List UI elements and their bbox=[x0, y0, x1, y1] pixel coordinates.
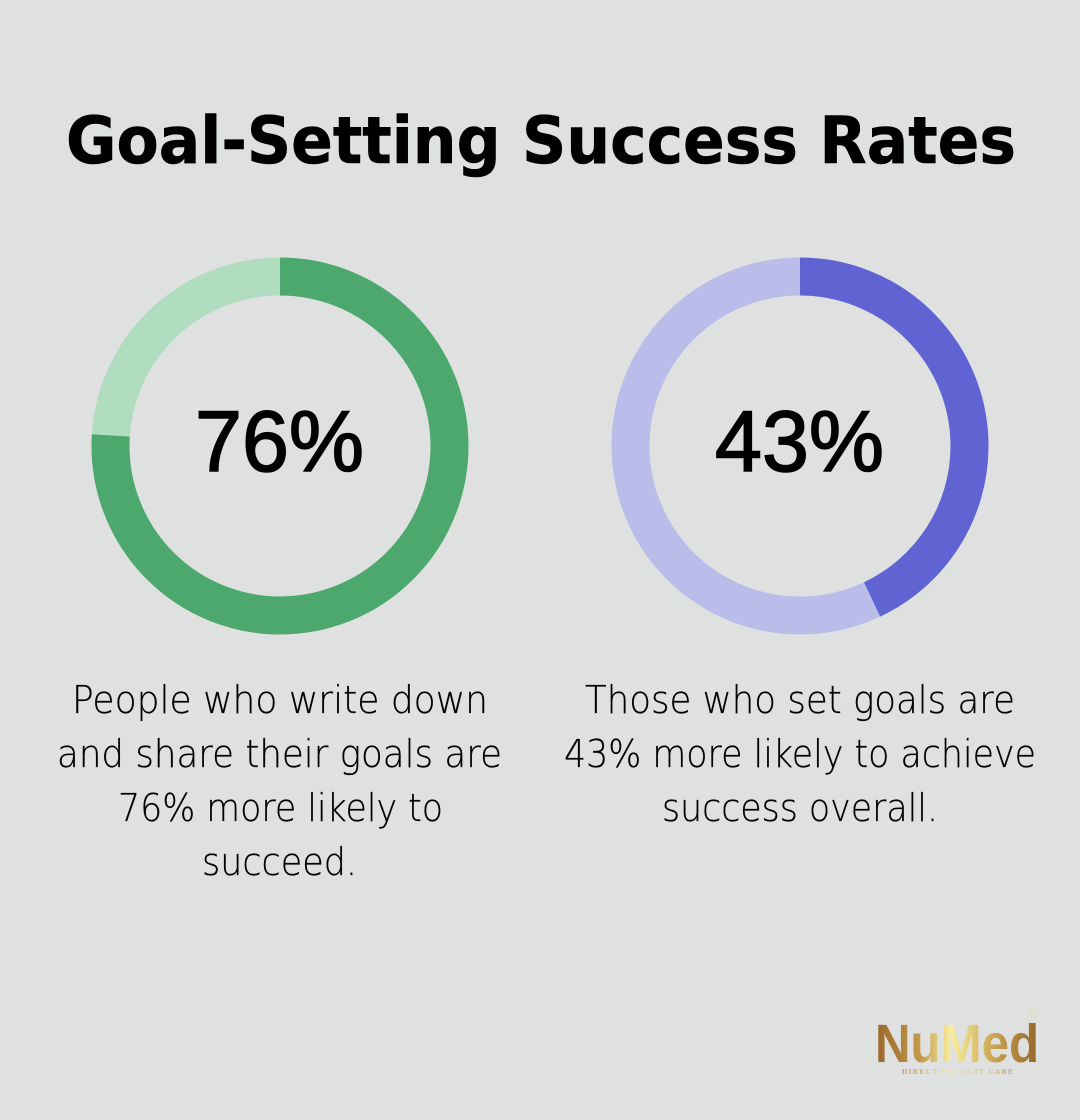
description: 43%: Those who set goals are bbox=[585, 678, 1015, 723]
value: 76%: 76% bbox=[195, 394, 364, 490]
panel: 76% statistic bbox=[57, 276, 502, 885]
panel: 43% statistic bbox=[564, 276, 1036, 831]
description: 76%: and share their goals are bbox=[57, 732, 502, 777]
logo: NuMed Direct Primary Care: NuMed bbox=[875, 1014, 1039, 1074]
description: 76%: succeed. bbox=[202, 840, 357, 885]
description: 76%: People who write down bbox=[72, 678, 488, 723]
donut chart: 43% bbox=[630, 276, 970, 616]
description: 76%: 76% more likely to bbox=[118, 786, 443, 831]
description: 43%: 43% more likely to achieve bbox=[564, 732, 1036, 777]
logo: NuMed Direct Primary Care: DIRECT PRIMARY CARE bbox=[902, 1067, 1013, 1076]
title: Goal-Setting Success Rates bbox=[66, 104, 1016, 179]
donut chart: 76% bbox=[110, 276, 450, 616]
value: 43%: 43% bbox=[715, 394, 884, 490]
description: 76% bbox=[57, 678, 502, 885]
description: 43%: success overall. bbox=[662, 786, 938, 831]
description: 43% bbox=[564, 678, 1036, 831]
